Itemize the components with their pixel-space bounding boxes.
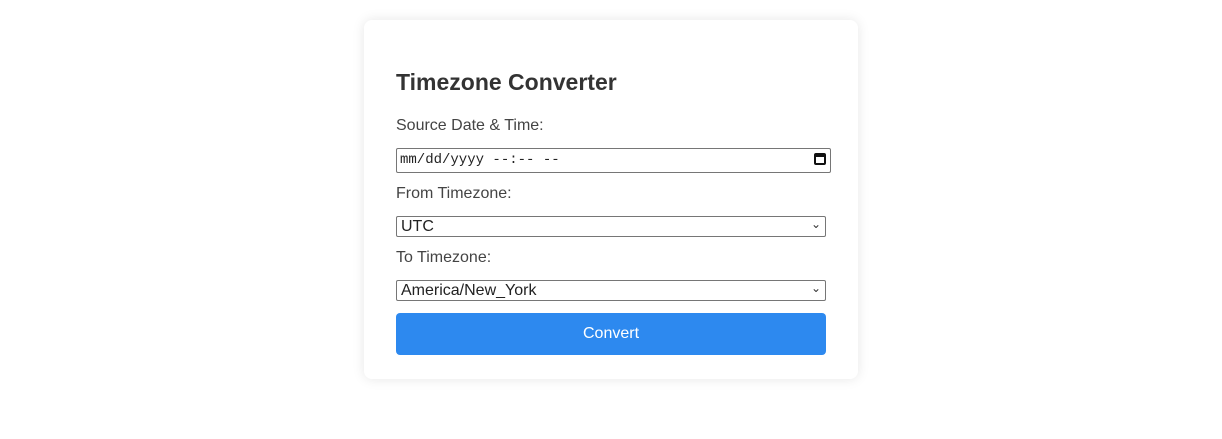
label: to timezone: To Timezone: [396, 249, 491, 266]
select: from: ⌄ [811, 217, 821, 231]
select: to [396, 280, 826, 301]
select: to: America/New_York [401, 282, 536, 299]
select: from: UTC [401, 218, 434, 235]
label: from timezone: From Timezone: [396, 185, 512, 202]
input: datetime [396, 148, 831, 173]
title: Timezone Converter [396, 69, 617, 95]
button: convert [396, 313, 826, 355]
button: convert: Convert [583, 325, 639, 342]
select: to: ⌄ [811, 281, 821, 295]
label: source date: Source Date & Time: [396, 117, 544, 134]
input: datetime: mm/dd/yyyy --:-- -- [400, 152, 560, 168]
select: from [396, 216, 826, 237]
icon: calendar [814, 153, 826, 165]
panel: converter card [364, 20, 858, 379]
